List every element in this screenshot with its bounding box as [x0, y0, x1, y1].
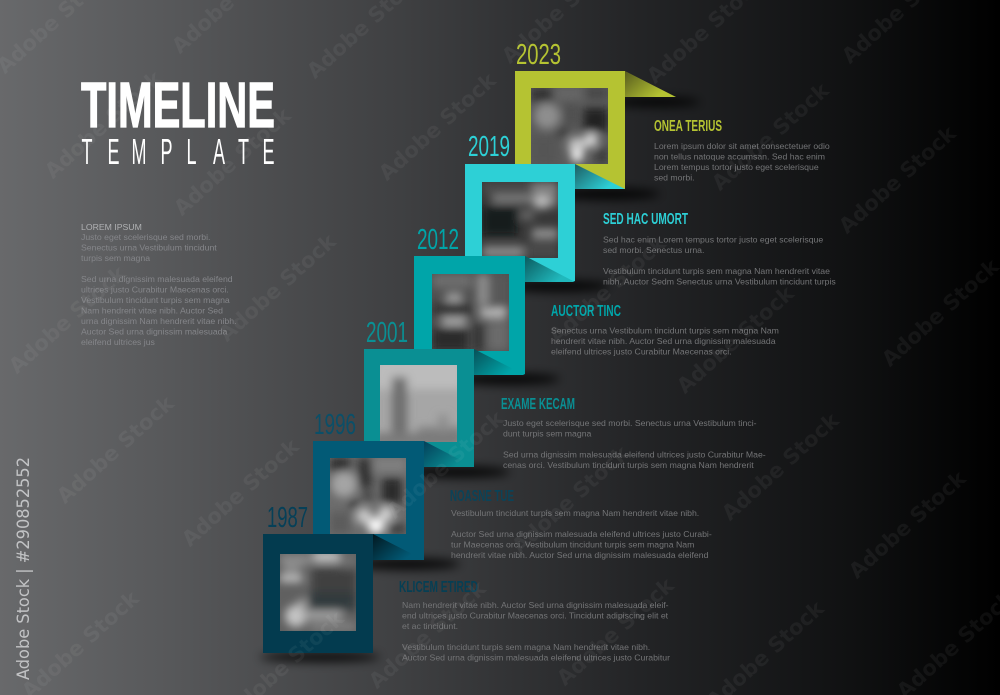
fold 2012: [525, 256, 575, 282]
watermarks: Adobe Stock: [717, 408, 844, 525]
title: TEMPLATE: [82, 132, 275, 173]
text block: Noasne Tue: hendrerit vitae nibh. Auctor Sed urna dignissim malesuada eleifend: [451, 550, 709, 560]
intro text block: Justo eget scelerisque sed morbi.: [81, 232, 210, 242]
heading: Sed Hac Umort: SED HAC UMORT: [603, 211, 688, 228]
watermarks: Adobe Stock: [40, 66, 167, 183]
text block: Auctor Tinc: hendrerit vitae nibh. Auctor Sed urna dignissim malesuada: [551, 336, 776, 346]
intro text block: ultrices justo Curabitur Maecenas orci.: [81, 284, 229, 294]
stock id label: Adobe Stock | #290852552: [14, 457, 34, 680]
watermarks: Adobe Stock: [877, 254, 1000, 371]
shadows under steps: [260, 97, 700, 662]
photo 2001: [380, 365, 457, 442]
text block: Exame Kecam: dunt turpis sem magna: [503, 428, 592, 438]
text block: Noasne Tue: Auctor Sed urna dignissim malesuada eleifend ultrices justo Curabi-: [451, 529, 712, 539]
step 2023: [515, 39, 676, 189]
text block: Auctor Tinc: eleifend ultrices justo Curabitur Maecenas orci.: [551, 346, 732, 356]
text block: Noasne Tue: Vestibulum tincidunt turpis sem magna Nam hendrerit vitae nibh.: [451, 508, 699, 518]
text block: Exame Kecam: Sed urna dignissim malesuada eleifend ultrices justo Curabitur Mae-: [503, 450, 766, 460]
year 1996: 1996: [314, 409, 356, 441]
watermarks: Adobe Stock: [552, 573, 679, 690]
text block: Exame Kecam: [501, 396, 766, 470]
fold 2023: [625, 71, 676, 97]
text block: Exame Kecam: cenas orci. Vestibulum tincidunt turpis sem magna Nam hendrerit: [503, 460, 754, 470]
text block: Onea Terius: Lorem tempus tortor justo eget scelerisque: [654, 162, 819, 172]
text block: Onea Terius: Lorem ipsum dolor sit amet consectetuer odio: [654, 141, 830, 151]
intro text block: Auctor Sed urna dignissim malesuada: [81, 326, 227, 336]
year 2019: 2019: [468, 131, 510, 163]
intro text block: LOREM IPSUM: [81, 222, 142, 232]
text block: Klicem Etired: et ac tincidunt.: [402, 621, 458, 631]
text block: Sed Hac Umort: nibh. Auctor Sedm Senectus urna Vestibulum tincidunt turpis: [603, 276, 836, 286]
text block: Noasne Tue: [450, 488, 712, 560]
watermarks: Adobe Stock: [544, 231, 671, 348]
year 2001: 2001: [366, 317, 408, 349]
title: [81, 69, 275, 173]
frame 2001: [364, 349, 474, 467]
watermarks: Adobe Stock: [52, 391, 179, 508]
photo 2012: [432, 274, 509, 351]
intro text block: Vestibulum tincidunt turpis sem magna: [81, 295, 230, 305]
text block: Klicem Etired: end ultrices justo Curabitur Maecenas orci. Tincidunt adipiscing elit et: [402, 610, 669, 620]
intro text block: Sed urna dignissim malesuada eleifend: [81, 274, 233, 284]
watermarks: Adobe Stock: [364, 576, 491, 693]
intro text block: urna dignissim Nam hendrerit vitae nibh.: [81, 316, 236, 326]
text block: Auctor Tinc: [551, 303, 779, 356]
photo 2019: [482, 182, 558, 258]
photo 1996: [330, 458, 406, 534]
text block: Klicem Etired: Vestibulum tincidunt turpis sem magna Nam hendrerit vitae nibh.: [402, 642, 650, 652]
watermarks: Adobe Stock: [707, 78, 834, 195]
year 2023: 2023: [516, 39, 561, 71]
text block: Onea Terius: non tellus natoque accumsan. Sed hac enim: [654, 152, 825, 162]
frame 2019: [465, 164, 575, 281]
fold 2019: [575, 164, 625, 189]
text block: Sed Hac Umort: Vestibulum tincidunt turpis sem magna Nam hendrerit vitae: [603, 266, 830, 276]
frame 2012: [414, 256, 525, 374]
text block: Klicem Etired: Auctor Sed urna dignissim malesuada eleifend ultrices justo Curabitur: [402, 652, 670, 662]
heading: Onea Terius: ONEA TERIUS: [654, 118, 722, 135]
text block: Auctor Tinc: Senectus urna Vestibulum tincidunt turpis sem magna Nam: [551, 326, 779, 336]
frame 1996: [313, 441, 424, 560]
intro text block: turpis sem magna: [81, 253, 150, 263]
text block: Noasne Tue: tur Maecenas orci. Vestibulum tincidunt turpis sem magna Nam: [451, 540, 694, 550]
year 2012: 2012: [417, 224, 459, 256]
intro text block: Nam hendrerit vitae nibh. Auctor Sed: [81, 306, 223, 316]
fold 1996: [424, 441, 474, 467]
watermarks: Adobe Stock: [169, 103, 296, 220]
heading: Noasne Tue: NOASNE TUE: [450, 488, 514, 505]
photo 2023: [531, 88, 608, 164]
watermarks: Adobe Stock: [374, 68, 501, 185]
watermarks: Adobe Stock: [4, 261, 131, 378]
watermarks: Adobe Stock: [177, 434, 304, 551]
text block: Klicem Etired: Nam hendrerit vitae nibh. Auctor Sed urna dignissim malesuada eleif-: [402, 600, 669, 610]
step 1987: [263, 502, 424, 653]
title: TIMELINE: [81, 69, 275, 141]
watermarks: Adobe Stock: [844, 466, 971, 583]
heading: Klicem Etired: KLICEM ETIRED: [399, 579, 478, 596]
intro text block: [81, 222, 236, 347]
intro text block: eleifend ultrices jus: [81, 337, 156, 347]
step 1996: [313, 409, 474, 560]
text block: Sed Hac Umort: [603, 211, 836, 286]
step 2012: [414, 224, 575, 374]
watermarks: Adobe Stock: [382, 406, 509, 523]
heading: Exame Kecam: EXAME KECAM: [501, 396, 575, 413]
text block: Onea Terius: sed morbi.: [654, 172, 695, 182]
frame 2023: [515, 71, 625, 189]
step 2001: [364, 317, 525, 467]
heading: Auctor Tinc: AUCTOR TINC: [551, 303, 621, 320]
text block: Sed Hac Umort: Sed hac enim Lorem tempus tortor justo eget scelerisque: [603, 234, 823, 244]
text block: Exame Kecam: Justo eget scelerisque sed morbi. Senectus urna Vestibulum tinci-: [503, 418, 757, 428]
frame 1987: [263, 534, 373, 653]
watermarks: Adobe Stock: [834, 121, 961, 238]
step 2019: [465, 131, 625, 281]
photo 1987: [280, 554, 356, 631]
fold 1987: [373, 534, 424, 560]
watermarks: Adobe Stock: [214, 229, 341, 346]
fold 2001: [474, 349, 525, 375]
text block: Onea Terius: [654, 118, 830, 182]
intro text block: Senectus urna Vestibulum tincidunt: [81, 242, 217, 252]
text block: Klicem Etired: [399, 579, 670, 662]
watermarks: Adobe Stock: [672, 281, 799, 398]
year 1987: 1987: [267, 502, 308, 534]
text block: Sed Hac Umort: sed morbi. Senectus urna.: [603, 245, 704, 255]
watermarks: Adobe Stock: [507, 441, 634, 558]
